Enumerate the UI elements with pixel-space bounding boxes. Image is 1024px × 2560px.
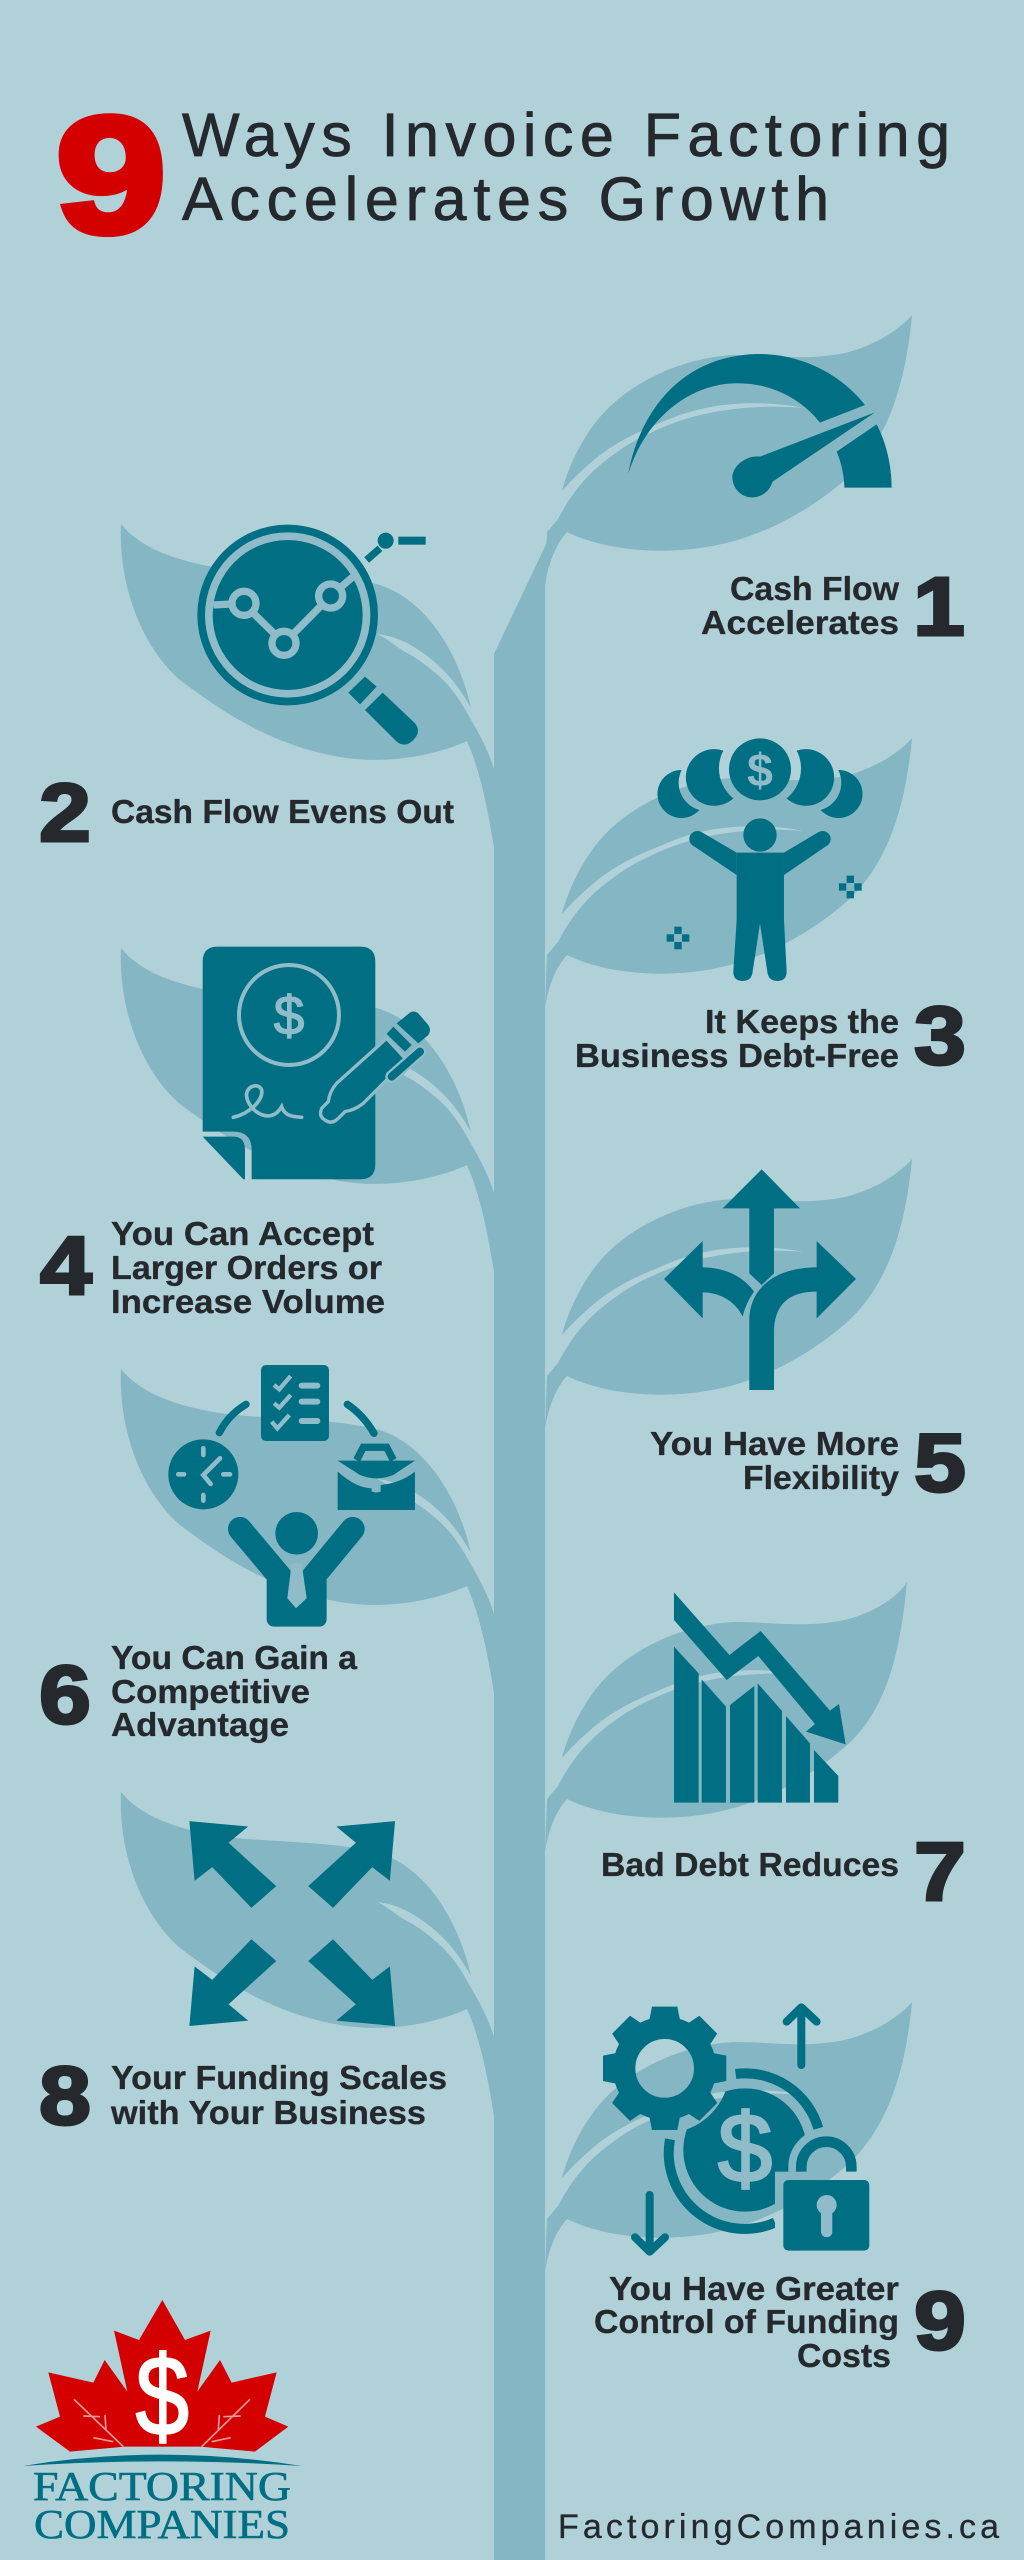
- label 6: Competitive: [111, 1674, 310, 1711]
- leaf 8: [121, 1792, 494, 2116]
- logo: Factoring Companies: [23, 2300, 302, 2547]
- number 1: 1: [913, 560, 965, 653]
- label 5: [650, 1426, 899, 1497]
- panel: item 6 competitive advantage: [39, 1365, 494, 1744]
- title line 1: Ways Invoice Factoring: [182, 101, 950, 169]
- label 6: You Can Gain a: [111, 1640, 357, 1677]
- number 4: 4: [40, 1219, 92, 1312]
- panel: item 7 bad debt reduces: [545, 1582, 966, 1918]
- title: [56, 83, 950, 267]
- big red 9: 9: [56, 83, 166, 267]
- leaf 3: [545, 738, 912, 1008]
- leaf 7: [545, 1582, 907, 1852]
- label 3: It Keeps the: [705, 1004, 899, 1041]
- label 8: with Your Business: [110, 2095, 426, 2132]
- label 9: Control of Funding: [594, 2304, 899, 2341]
- icon: gear coin lock and arrows: [603, 2007, 869, 2252]
- website url: FactoringCompanies.ca: [558, 2508, 999, 2546]
- icon: red maple leaf with dollar sign: $: [136, 2334, 189, 2460]
- icon: four outward arrows: [189, 1821, 395, 2026]
- label 5: Flexibility: [743, 1460, 899, 1497]
- number 7: 7: [914, 1825, 966, 1918]
- leaf 5: [545, 1159, 912, 1429]
- label 1: Cash Flow: [730, 571, 900, 608]
- icon: gear coin lock and arrows: $: [718, 2094, 772, 2203]
- icon: person with coins: [657, 738, 863, 981]
- icon: speedometer gauge: [628, 354, 892, 497]
- leaf 1: [545, 315, 912, 585]
- leaf 2: [121, 524, 494, 848]
- label 9: [594, 2271, 899, 2375]
- panel: item 1 cash flow accelerates: [545, 315, 965, 653]
- label 8: [110, 2060, 447, 2132]
- label 4: Larger Orders or: [111, 1250, 382, 1287]
- label 3: Business Debt-Free: [575, 1038, 899, 1075]
- number 6: 6: [39, 1648, 91, 1741]
- icon: three-way arrows: [664, 1169, 856, 1390]
- label 6: Advantage: [111, 1707, 289, 1744]
- number 3: 3: [914, 989, 966, 1082]
- leaf 9: [545, 2002, 912, 2272]
- number 9: 9: [914, 2274, 966, 2367]
- icon: magnifier with chart: [197, 525, 426, 745]
- title line 2: Accelerates Growth: [182, 165, 829, 233]
- panel: item 8 funding scales: [39, 1792, 494, 2142]
- icon: person with coins: $: [747, 744, 773, 796]
- label 8: Your Funding Scales: [111, 2060, 447, 2097]
- label 1: Accelerates: [701, 605, 899, 642]
- label 6: [111, 1640, 357, 1744]
- label 4: Increase Volume: [111, 1284, 385, 1321]
- panel: item 2 cash flow evens out: [39, 524, 494, 859]
- label 4: You Can Accept: [111, 1216, 374, 1253]
- panel: item 9 funding costs: [545, 2002, 966, 2375]
- logo wordmark: [33, 2463, 291, 2547]
- icon: red maple leaf with dollar sign: [23, 2300, 302, 2466]
- label 4: [111, 1216, 385, 1321]
- label 7: Bad Debt Reduces: [601, 1847, 899, 1884]
- label 9: Costs: [797, 2338, 891, 2375]
- logo wordmark: COMPANIES: [34, 2501, 290, 2547]
- number 8: 8: [39, 2049, 91, 2142]
- icon: businessman with checklist clock and briefcase: [168, 1365, 415, 1627]
- icon: signed document and pen: [203, 947, 430, 1179]
- icon: falling bar chart with arrow: [674, 1592, 846, 1803]
- logo wordmark: FACTORING: [33, 2463, 291, 2509]
- label 1: [701, 571, 900, 642]
- panel: item 4 larger orders: [40, 947, 494, 1321]
- label 9: You Have Greater: [609, 2271, 899, 2308]
- leaf 4: [121, 948, 494, 1272]
- number 2: 2: [39, 766, 91, 859]
- label 5: You Have More: [650, 1426, 899, 1463]
- number 5: 5: [914, 1416, 966, 1509]
- panel: item 5 flexibility: [545, 1159, 966, 1509]
- label 3: [575, 1004, 899, 1075]
- label 2: Cash Flow Evens Out: [111, 794, 454, 831]
- panel: item 3 debt-free: [545, 738, 966, 1082]
- leaf 6: [121, 1369, 494, 1693]
- plant stem: [494, 519, 567, 2560]
- icon: signed document and pen: $: [274, 984, 304, 1046]
